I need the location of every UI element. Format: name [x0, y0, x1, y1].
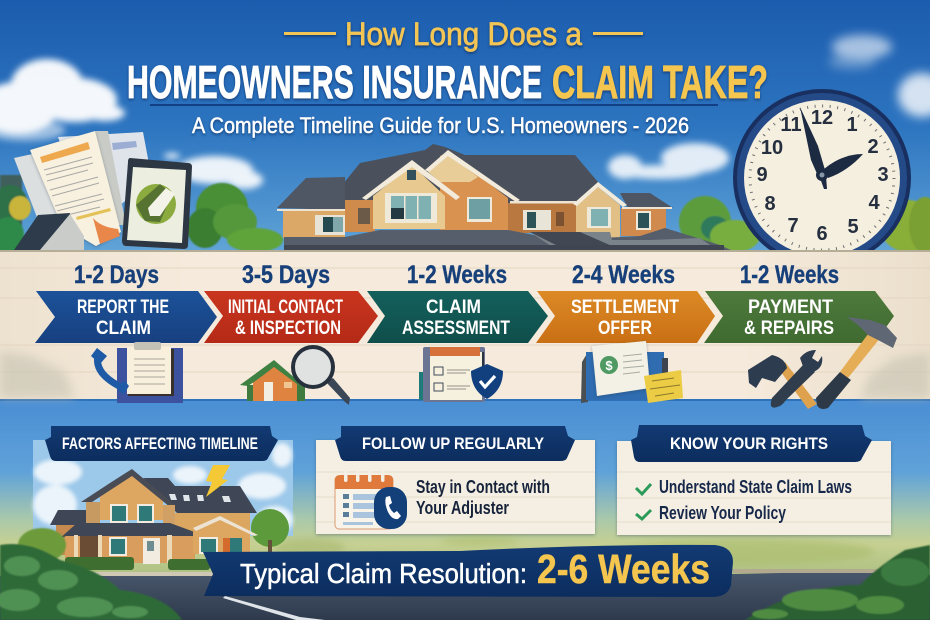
- windows: [109, 504, 160, 564]
- illustration: house with lightning: [50, 465, 289, 570]
- icon: clock: 9: [756, 164, 768, 186]
- arrow: [204, 291, 378, 343]
- icon: clock: [733, 89, 911, 267]
- arrow: REPORT THE: [77, 297, 169, 318]
- arrow: & REPAIRS: [744, 318, 834, 339]
- title line one: How Long Does a: [345, 16, 582, 52]
- road: [0, 569, 930, 620]
- lower background: [0, 400, 930, 580]
- tree: [251, 509, 289, 547]
- porch roof: [58, 523, 200, 540]
- text: stay in contact: [416, 477, 550, 518]
- icon: settlement document and note: [581, 341, 683, 403]
- panel: factors affecting timeline: [33, 426, 293, 570]
- right wing: [620, 193, 673, 208]
- icon: hammer and tools: [748, 317, 897, 409]
- clouds: [0, 35, 930, 189]
- duration: 2-4 Weeks: [572, 261, 675, 289]
- second gable trim: [425, 150, 520, 202]
- title line two: HOMEOWNERS INSURANCE: [127, 56, 542, 108]
- header ribbon: [335, 426, 575, 461]
- arrow: SETTLEMENT: [571, 297, 679, 318]
- tablet: [122, 158, 192, 249]
- duration: 1-2 Days: [74, 261, 159, 289]
- icon: clock: 7: [787, 215, 799, 237]
- arrow: CLAIM: [96, 318, 151, 339]
- title: [127, 16, 768, 138]
- right gable: [193, 518, 250, 553]
- step 2: initial contact and inspection: [204, 261, 378, 405]
- sky background: [0, 0, 930, 255]
- timeline band: [0, 250, 930, 409]
- checklist: Review Your Policy: [659, 503, 786, 523]
- dark roof: [143, 478, 257, 513]
- text: stay in contact: Stay in Contact with: [416, 477, 550, 497]
- header ribbon: FACTORS AFFECTING TIMELINE: [62, 434, 258, 453]
- small roof: [14, 213, 70, 250]
- subtitle: A Complete Timeline Guide for U.S. Homeowners - 2026: [192, 113, 689, 138]
- arrow: [704, 291, 894, 343]
- step 4: settlement offer: [536, 261, 715, 403]
- illustration: house: [277, 144, 735, 252]
- text: stay in contact: Your Adjuster: [416, 498, 509, 518]
- icon: clock: 6: [816, 223, 828, 245]
- panel: know your rights: [617, 425, 891, 535]
- right gable: [576, 187, 620, 238]
- arrow: [536, 291, 715, 343]
- title line two: CLAIM TAKE?: [552, 56, 768, 108]
- skylights: [169, 494, 231, 502]
- icon: checklist and shield: [419, 347, 503, 402]
- main paper: [30, 131, 121, 246]
- bushes: [0, 528, 930, 620]
- arrow: [35, 291, 217, 343]
- icon: clock: 10: [761, 137, 783, 159]
- lower middle: [508, 203, 576, 233]
- duration: 1-2 Weeks: [740, 261, 839, 289]
- icon: calendar and phone: [335, 471, 407, 529]
- step 1: report the claim: [35, 261, 217, 403]
- icon: clock: 8: [764, 193, 776, 215]
- icon: clock: 12: [811, 107, 833, 129]
- arrow: INITIAL CONTACT: [228, 297, 343, 318]
- icon: clock: 3: [877, 164, 889, 186]
- upper wall: [100, 473, 163, 520]
- left wing: [283, 210, 345, 238]
- back paper left: [14, 148, 90, 225]
- distant hedges: [275, 536, 875, 565]
- banner: typical claim resolution: Typical Claim Resolution:: [240, 558, 527, 589]
- back roof: [330, 144, 598, 205]
- icon: clock: 5: [847, 216, 859, 238]
- duration: 1-2 Weeks: [407, 261, 507, 289]
- background trees: [0, 175, 930, 253]
- banner: typical claim resolution: [203, 545, 733, 597]
- middle section: [345, 200, 375, 232]
- icon: clock: 1: [846, 114, 858, 136]
- arrow: [367, 291, 548, 343]
- icon: clock: 4: [868, 192, 880, 214]
- header ribbon: [631, 425, 872, 462]
- left wing: [56, 525, 88, 555]
- arrow: & INSPECTION: [235, 318, 341, 339]
- main gable: [373, 165, 445, 229]
- hedges: [65, 557, 134, 570]
- header ribbon: FOLLOW UP REGULARLY: [362, 434, 545, 453]
- clock hands: [800, 107, 863, 189]
- arrow: PAYMENT: [748, 297, 833, 318]
- step 5: payment and repairs: [704, 261, 897, 409]
- back paper right: [58, 132, 152, 205]
- icon: house and magnifier: [240, 347, 350, 405]
- icon: settlement document and note: $: [605, 358, 613, 373]
- panel: follow up regularly: [316, 426, 595, 534]
- arrow: CLAIM: [426, 297, 481, 318]
- header ribbon: KNOW YOUR RIGHTS: [670, 434, 828, 453]
- checklist: Understand State Claim Laws: [659, 477, 852, 497]
- panel clouds: [33, 443, 293, 534]
- icon: clock: 11: [780, 114, 802, 136]
- illustration: documents and tablet: [14, 131, 192, 250]
- lightning bolt: [206, 465, 230, 497]
- checklist: [636, 477, 852, 523]
- banner: typical claim resolution: 2-6 Weeks: [537, 546, 710, 592]
- second gable walls: [440, 152, 508, 230]
- header ribbon: [45, 426, 278, 461]
- step 3: claim assessment: [367, 261, 548, 402]
- duration: 3-5 Days: [242, 261, 330, 289]
- arrow: OFFER: [598, 318, 652, 339]
- foreground roof: [284, 228, 735, 252]
- icon: clock: 2: [867, 136, 879, 158]
- icon: phone and clipboard: [91, 342, 183, 403]
- ground wall: [65, 535, 195, 563]
- arrow: ASSESSMENT: [402, 318, 510, 339]
